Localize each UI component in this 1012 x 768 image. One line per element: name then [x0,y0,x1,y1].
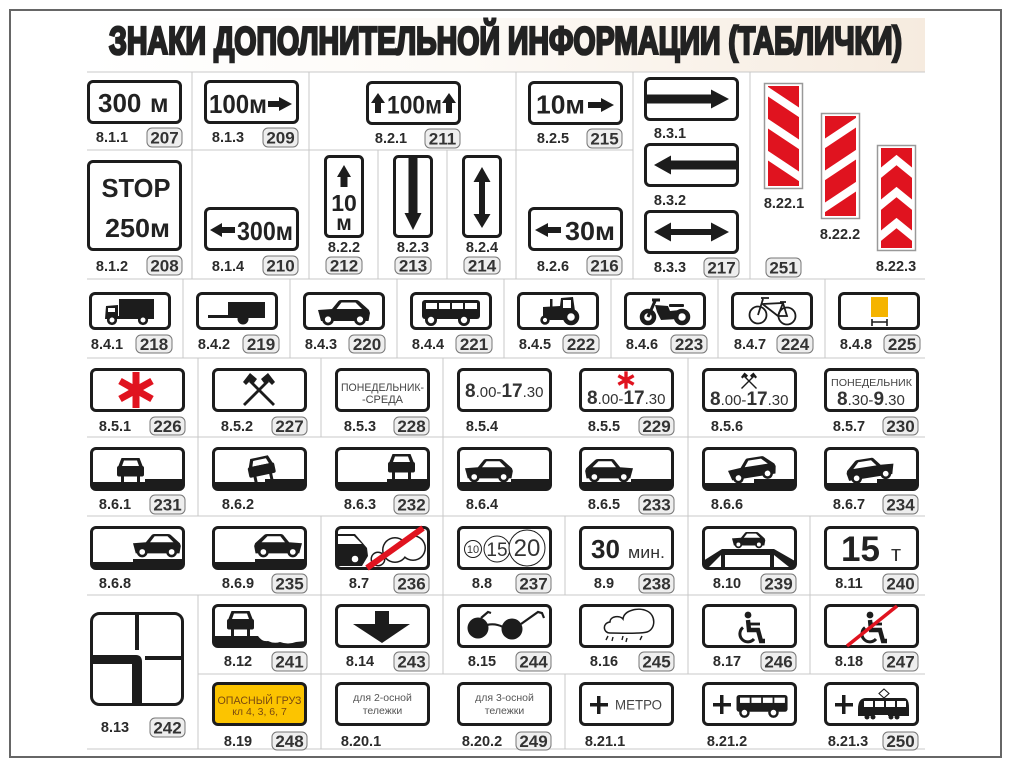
code 8.20.2: 8.20.2 [462,734,502,750]
badge 215: 215 [590,130,619,148]
cell: sign 8.6.6 [703,448,796,513]
plate: car on road with ditch [213,606,306,647]
cell: sign 8.6.1 [91,448,185,514]
plate: Monday hours: ПОНЕДЕЛЬНИК [831,377,913,389]
plate: 30 minutes: 30 [591,534,620,564]
plate: wheelchair crossed out [826,606,918,646]
plate: car tilted left [703,448,796,490]
code 8.1.2: 8.1.2 [96,259,128,275]
plate: car side parked left [458,448,551,490]
code 8.22.1: 8.22.1 [764,196,804,212]
cell: sign 8.21.2 [704,684,796,750]
badge 219: 219 [247,335,275,354]
code 8.2.3: 8.2.3 [397,240,429,256]
plate: arrow up 10 m: 10 [331,190,357,216]
code 8.4.2: 8.4.2 [198,337,230,353]
badge 208: 208 [150,256,179,276]
cell: sign 8.2.4 [464,156,500,276]
code 8.6.2: 8.6.2 [222,497,254,513]
cell: sign 8.5.3 [336,370,429,436]
badge 224: 224 [781,335,810,354]
plate: STOP 250 m: 250м [105,213,170,243]
cell: sign 8.2.1 [368,82,460,148]
cell: sign 8.20.1 [336,684,428,750]
code 8.6.8: 8.6.8 [99,576,131,592]
plate: 30 minutes: мин. [628,543,665,562]
plate: truck [90,294,170,328]
cell: sign 8.2.2 [326,156,362,276]
cell: sign 8.6.4 [458,448,551,513]
badge 238: 238 [642,574,671,594]
badge 218: 218 [140,335,168,354]
plate: car parked right facing [213,528,306,569]
cell: signs 8.3.1 to 8.3.3 [646,78,739,278]
badge 209: 209 [266,128,295,148]
plate: glasses [458,606,550,646]
code 8.16: 8.16 [590,654,618,670]
badge 245: 245 [642,652,671,672]
plate: arrow up 10 m [326,156,362,236]
code 8.22.3: 8.22.3 [876,259,916,275]
plate: plus metro: МЕТРО [615,696,662,712]
plate: Monday to Wednesday: ПОНЕДЕЛЬНИК- [341,382,424,394]
code 8.4.4: 8.4.4 [412,337,444,353]
badge 223: 223 [675,335,703,354]
plate: left arrow 30 m: 30м [565,216,615,246]
plate: red stripes up right [821,114,860,218]
code 8.4.8: 8.4.8 [840,337,872,353]
cell: sign 8.15 [458,606,551,672]
plate: hours: 8.00-17.30 [465,381,543,402]
badge 211: 211 [429,130,456,148]
badge 217: 217 [707,258,736,278]
code 8.7: 8.7 [349,576,369,592]
badge 249: 249 [519,732,548,751]
plate: 30 minutes [580,528,672,568]
badge 248: 248 [275,732,304,751]
plate: STOP 250 m [88,162,180,250]
badge 236: 236 [397,574,426,594]
badge 251: 251 [769,258,798,278]
badge 212: 212 [330,256,358,276]
cell: sign 8.6.2 [213,448,306,513]
cell: sign 8.16 [580,606,674,672]
plate: speed circles: 15 [486,540,508,561]
plate: arrow left [646,144,738,186]
plate: two-axle bogie [336,684,428,724]
plate: double arrow [646,212,738,252]
badge 235: 235 [275,574,304,594]
plate: trailer [198,294,276,328]
cell: sign 8.5.6 [704,370,796,435]
plate: dangerous cargo [214,684,306,724]
badge 232: 232 [397,496,426,514]
code 8.18: 8.18 [835,654,863,670]
badge 240: 240 [886,574,915,594]
plate: car [304,294,384,328]
plate: road junction [92,614,183,705]
plate: car front on road [91,448,184,490]
plate: 10 m right arrow: 10м [536,90,585,120]
title banner [87,18,925,72]
plate: exhaust crossed out [336,528,428,568]
plate: 100 m right arrow: 100м [209,89,267,119]
badge 233: 233 [642,496,671,514]
cell: sign 8.5.5 [580,370,674,436]
plate: left arrow 300 m: 300м [237,216,293,246]
plate: Monday to Wednesday: -СРЕДА [362,394,404,406]
plate: car on overpass [703,528,796,568]
badge 230: 230 [886,417,915,436]
plate: crossed hammers [214,370,306,410]
code 8.6.3: 8.6.3 [344,497,376,513]
badge 231: 231 [153,496,182,514]
code 8.22.2: 8.22.2 [820,227,860,243]
code 8.17: 8.17 [713,654,741,670]
code 8.6.6: 8.6.6 [711,497,743,513]
badge 242: 242 [153,718,182,738]
plate: car side parked right [580,448,673,490]
plate: 300 m [88,82,180,122]
badge 226: 226 [153,417,182,436]
cell: sign 8.2.3 [394,156,432,276]
badge 225: 225 [888,335,916,354]
cell: sign 8.4.6 motorcycle [626,294,707,354]
cell: sign 8.12 [213,606,307,672]
cell: sign 8.17 [704,606,796,672]
code 8.12: 8.12 [224,654,252,670]
badge 229: 229 [642,417,671,436]
badge 216: 216 [590,256,619,276]
cell: sign 8.1.3 [206,82,298,148]
plate: arrow up 10 m: м [336,212,352,235]
plate: 300 m: 300 [98,88,141,118]
badge 214: 214 [468,256,497,276]
plate: three-axle bogie: тележки [485,705,524,717]
cell: sign 8.4.4 bus [412,294,492,354]
plate: 15 tons [826,528,918,569]
cell: sign 8.4.1 truck [90,294,172,354]
badge 241: 241 [275,652,304,672]
code 8.4.6: 8.4.6 [626,337,658,353]
code 8.6.4: 8.6.4 [466,497,498,513]
plate: 300 m: м [150,90,168,118]
cell: sign 8.8 [458,528,551,594]
badge 207: 207 [150,128,179,148]
plate: bus [412,294,490,328]
code 8.4.5: 8.4.5 [519,337,551,353]
cell: sign 8.10 [703,528,796,594]
code 8.5.3: 8.5.3 [344,419,376,435]
cell: sign 8.14 [336,606,429,672]
badge 228: 228 [397,417,426,436]
plate: Monday hours: 8.30-9.30 [837,389,905,410]
plate: three-axle bogie: для 3-осной [475,692,534,704]
plate: car front on curb [336,448,429,490]
plate: plus tram [826,684,918,724]
code 8.6.7: 8.6.7 [833,497,865,513]
plate: red stripes down right [764,84,803,188]
code 8.5.5: 8.5.5 [588,419,620,435]
cell: sign 8.7 [336,528,429,594]
plate: STOP 250 m: STOP [102,175,170,203]
cell: sign 8.4.2 trailer [198,294,279,354]
code 8.21.1: 8.21.1 [585,734,625,750]
code 8.19: 8.19 [224,734,252,750]
code 8.2.6: 8.2.6 [537,259,569,275]
badge 221: 221 [460,335,488,354]
plate: two-axle bogie: тележки [363,705,402,717]
cell: sign 8.9 [580,528,674,594]
code 8.15: 8.15 [468,654,496,670]
cell: sign 8.21.1 [580,684,672,750]
cell: signs 8.22.1 to 8.22.3 [764,84,916,278]
cell: sign 8.20.2 [458,684,551,751]
plate: red asterisk [92,370,184,410]
code 8.20.1: 8.20.1 [341,734,381,750]
code 8.21.2: 8.21.2 [707,734,747,750]
code 8.21.3: 8.21.3 [828,734,868,750]
code 8.1.3: 8.1.3 [212,130,244,146]
badge 220: 220 [353,335,381,354]
plate: dangerous cargo: кл 4, 3, 6, 7 [232,706,287,718]
cell: sign 8.4.5 tractor [518,294,599,354]
plate: big down arrow [336,606,428,646]
plate: speed circles: 20 [514,535,540,562]
badge 210: 210 [266,256,295,276]
code 8.5.6: 8.5.6 [711,419,743,435]
code 8.6.1: 8.6.1 [99,497,131,513]
cell: sign 8.18 [826,606,918,672]
plate: speed circles [458,528,550,568]
cell: sign 8.1.4 [206,208,298,276]
plate: Monday hours [826,370,918,410]
plate: arrow up and down [464,156,500,236]
cell: sign 8.6.3 [336,448,429,514]
plate: arrow down [394,156,432,236]
code 8.1.1: 8.1.1 [96,130,128,146]
code 8.1.4: 8.1.4 [212,259,244,275]
code 8.13: 8.13 [101,720,129,736]
plate: two-axle bogie: для 2-осной [353,692,412,704]
code 8.5.2: 8.5.2 [221,419,253,435]
badge 247: 247 [886,652,915,672]
plate: speed circles: 10 [467,544,479,556]
code 8.6.9: 8.6.9 [222,576,254,592]
plate: red chevrons [877,146,916,250]
badge 237: 237 [519,574,548,594]
cell: sign 8.5.1 [92,370,185,436]
cell: sign 8.2.6 [530,208,622,276]
badge 227: 227 [275,417,304,436]
code 8.2.2: 8.2.2 [328,240,360,256]
code 8.4.3: 8.4.3 [305,337,337,353]
badge 244: 244 [519,652,548,672]
cell: sign 8.2.5 [530,82,622,148]
cell: sign 8.6.9 [213,528,307,594]
code 8.5.4: 8.5.4 [466,419,498,435]
badge 250: 250 [886,732,915,751]
code 8.3.2: 8.3.2 [654,193,686,209]
cell: sign 8.11 [826,528,918,594]
badge 239: 239 [764,574,793,594]
plate: wheelchair [704,606,796,646]
plate: car front tilted [213,448,306,490]
code 8.9: 8.9 [594,576,614,592]
cell: sign 8.5.4 [458,370,550,435]
code 8.6.5: 8.6.5 [588,497,620,513]
code 8.2.4: 8.2.4 [466,240,498,256]
cell: sign 8.13 [92,614,185,738]
cell: sign 8.21.3 [826,684,918,751]
code 8.3.3: 8.3.3 [654,260,686,276]
cell: sign 8.1.2 [88,162,182,276]
cell: sign 8.4.7 bicycle [732,294,813,354]
cell: sign 8.19 [214,684,307,751]
code 8.11: 8.11 [835,576,863,592]
cell: sign 8.1.1 [88,82,182,148]
code 8.2.5: 8.2.5 [537,131,569,147]
plate: car tilted right [825,448,918,490]
plate: car parked upper right [91,528,184,569]
code 8.5.1: 8.5.1 [99,419,131,435]
badge 234: 234 [886,496,915,514]
code 8.8: 8.8 [472,576,492,592]
plate: hammers and hours: 8.00-17.30 [710,389,788,410]
plate: tractor [518,294,598,328]
badge 213: 213 [399,256,427,276]
code 8.5.7: 8.5.7 [833,419,865,435]
plate: 15 tons: т [891,541,901,566]
plate: plus bus [704,684,796,724]
plate: bicycle [732,294,812,328]
plate: Monday to Wednesday [336,370,428,410]
code 8.10: 8.10 [713,576,741,592]
cell: sign 8.5.2 [214,370,307,436]
cell: sign 8.5.7 [826,370,918,436]
code 8.3.1: 8.3.1 [654,126,686,142]
cell: sign 8.6.8 [91,528,184,592]
plate: rain cloud [580,606,672,646]
badge 243: 243 [397,652,426,672]
plate: 100 m up arrows: 100м [387,92,442,120]
plate: orange placard [840,294,918,328]
code 8.4.7: 8.4.7 [734,337,766,353]
plate: dangerous cargo: ОПАСНЫЙ ГРУЗ [218,694,302,707]
cell: sign 8.6.7 [825,448,918,514]
plate: three-axle bogie [458,684,550,724]
badge 246: 246 [764,652,793,672]
badge 222: 222 [567,335,595,354]
cell: sign 8.6.5 [580,448,674,514]
plate: motorcycle [626,294,704,328]
plate: 15 tons: 15 [841,530,880,569]
code 8.14: 8.14 [346,654,374,670]
cell: sign 8.4.3 car [304,294,385,354]
code 8.4.1: 8.4.1 [91,337,123,353]
cell: sign 8.4.8 [840,294,920,354]
plate: asterisk and hours: 8.00-17.30 [587,388,665,409]
code 8.2.1: 8.2.1 [375,131,407,147]
plate: arrow right [646,78,738,120]
